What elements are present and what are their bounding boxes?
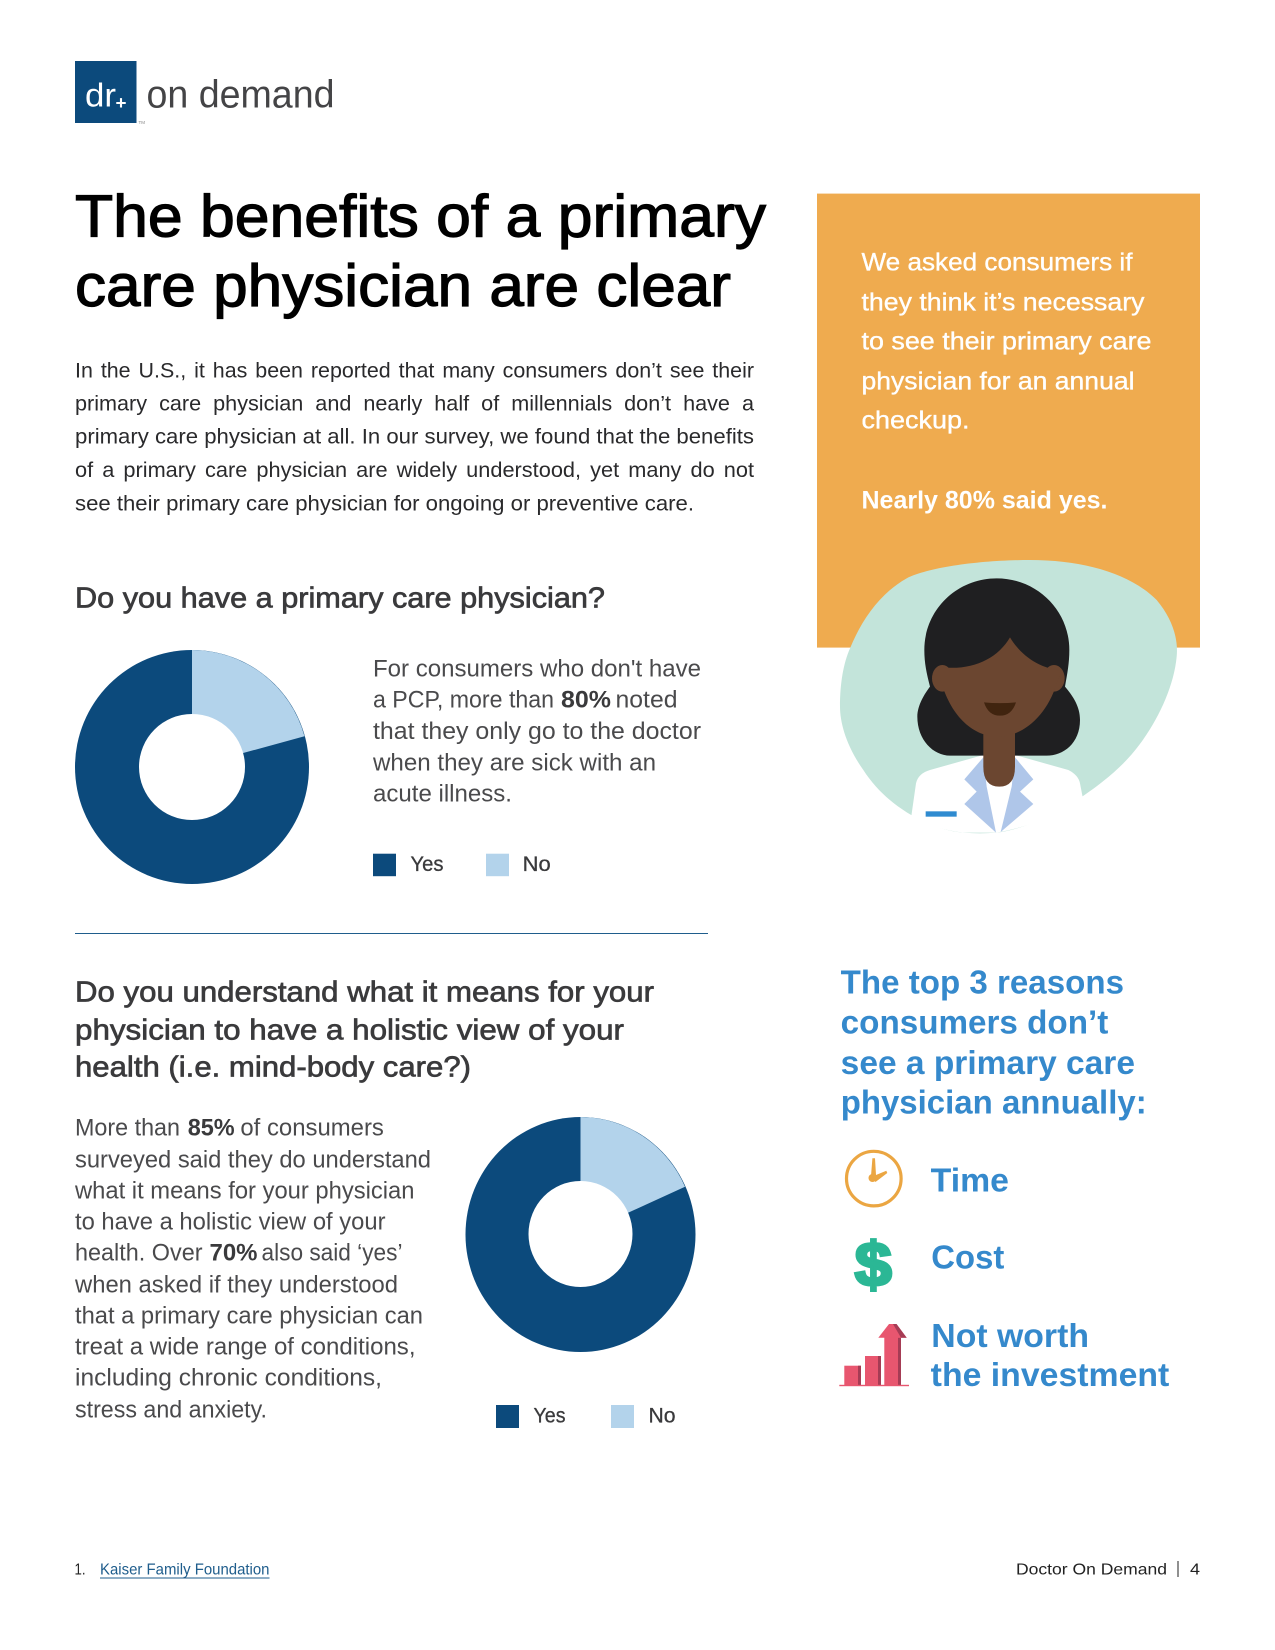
logo: dr+ on demand <box>75 61 334 125</box>
legend: yes and no <box>373 852 551 876</box>
intro paragraph: of a primary care physician are widely understood, yet many do not <box>75 458 754 482</box>
title: care physician are clear <box>75 253 731 319</box>
label: cost: Cost <box>931 1238 1004 1275</box>
panel: holistic view of health <box>74 977 696 1428</box>
text block: 85 percent understand: 85% <box>188 1114 235 1142</box>
icon: rising bar chart <box>839 1324 909 1386</box>
heading: do you have a PCP: Do you have a primary care physician? <box>75 583 605 615</box>
text block: consumers without a PCP: that they only go to the doctor <box>373 718 701 745</box>
label: time: Time <box>931 1162 1009 1199</box>
intro paragraph: In the U.S., it has been reported that many consumers don’t see their <box>75 358 754 382</box>
legend: yes and no: Yes <box>534 1404 566 1428</box>
heading: holistic view question <box>75 977 654 1084</box>
text block: 85 percent understand: of consumers <box>240 1114 384 1142</box>
text block: consumers without a PCP: a PCP, more than <box>373 687 554 714</box>
logo: dr+ on demand: on demand <box>146 73 334 116</box>
footer: page number: Doctor On Demand <box>1016 1561 1167 1578</box>
callout text: they think it’s necessary <box>862 288 1145 316</box>
intro paragraph: primary care physician and nearly half of millennials don’t have a <box>75 392 754 416</box>
panel: do you have a primary care physician <box>75 583 701 884</box>
icon: dollar sign: $ <box>855 1231 892 1300</box>
text block: 85 percent understand: when asked if they understood <box>74 1272 398 1298</box>
callout text: to see their primary care <box>862 328 1152 356</box>
legend: yes and no <box>496 1404 676 1428</box>
text block: consumers without a PCP: acute illness. <box>373 781 512 808</box>
callout text: We asked consumers if <box>862 248 1133 276</box>
text block: consumers without a PCP: 80% <box>561 687 611 714</box>
callout text <box>862 248 1152 514</box>
heading: holistic view question: health (i.e. mind-body care?) <box>75 1052 471 1084</box>
callout text: checkup. <box>862 406 970 434</box>
donut chart: PCP yes vs no <box>75 650 309 884</box>
donut chart: holistic view yes vs no <box>466 1117 696 1352</box>
label: not worth the investment <box>931 1317 1169 1393</box>
text block: consumers without a PCP: For consumers who don't have <box>373 656 701 683</box>
footnote: source: Kaiser Family Foundation <box>100 1561 270 1578</box>
text block: 85 percent understand: stress and anxiety. <box>75 1396 267 1423</box>
text block: 85 percent understand: 70% <box>210 1240 258 1266</box>
panel: annual checkup callout <box>817 194 1200 648</box>
callout text: Nearly 80% said yes. <box>862 486 1108 514</box>
heading: top 3 reasons: physician annually: <box>841 1084 1147 1121</box>
text block: 85 percent understand <box>74 1114 431 1423</box>
text block: consumers without a PCP: noted <box>616 687 678 714</box>
text block: 85 percent understand: to have a holistic view of your <box>75 1208 386 1236</box>
intro paragraph: see their primary care physician for ongoing or preventive care. <box>75 492 694 516</box>
text block: consumers without a PCP <box>372 656 701 808</box>
title: The benefits of a primary <box>75 184 767 250</box>
heading: top 3 reasons: consumers don’t <box>841 1004 1108 1041</box>
intro paragraph <box>75 358 754 516</box>
icon: clock <box>846 1151 901 1206</box>
footer: page number: 4 <box>1190 1561 1200 1578</box>
text block: 85 percent understand: what it means for your physician <box>74 1178 414 1204</box>
text block: 85 percent understand: surveyed said they do understand <box>75 1146 431 1174</box>
heading: holistic view question: physician to have a holistic view of your <box>75 1014 624 1046</box>
logo: dr+ on demand: TM <box>138 120 145 125</box>
text block: consumers without a PCP: when they are sick with an <box>372 750 656 777</box>
label: not worth the investment: the investment <box>931 1356 1169 1393</box>
heading: top 3 reasons: The top 3 reasons <box>841 964 1124 1001</box>
legend: yes and no: Yes <box>410 852 444 876</box>
text block: 85 percent understand: including chronic conditions, <box>75 1364 382 1392</box>
logo: dr+ on demand: + <box>116 93 126 113</box>
heading: holistic view question: Do you understand what it means for your <box>75 977 654 1009</box>
heading: top 3 reasons <box>841 964 1147 1121</box>
legend: yes and no: No <box>648 1404 676 1428</box>
logo: dr+ on demand: dr <box>85 76 116 114</box>
panel: top 3 reasons <box>839 964 1169 1393</box>
text block: 85 percent understand: also said ‘yes’ <box>262 1240 402 1266</box>
intro paragraph: primary care physician at all. In our survey, we found that the benefits <box>75 424 754 448</box>
illustration: doctor portrait <box>840 560 1177 833</box>
text block: 85 percent understand: health. Over <box>75 1240 203 1266</box>
text block: 85 percent understand: treat a wide range of conditions, <box>75 1334 416 1360</box>
legend: yes and no: No <box>523 852 551 876</box>
title <box>75 184 767 319</box>
callout text: physician for an annual <box>862 367 1134 395</box>
text block: 85 percent understand: that a primary care physician can <box>75 1302 423 1330</box>
text block: 85 percent understand: More than <box>75 1114 180 1142</box>
label: not worth the investment: Not worth <box>931 1317 1089 1354</box>
footnote: source: 1. <box>74 1561 86 1578</box>
heading: top 3 reasons: see a primary care <box>841 1044 1135 1081</box>
